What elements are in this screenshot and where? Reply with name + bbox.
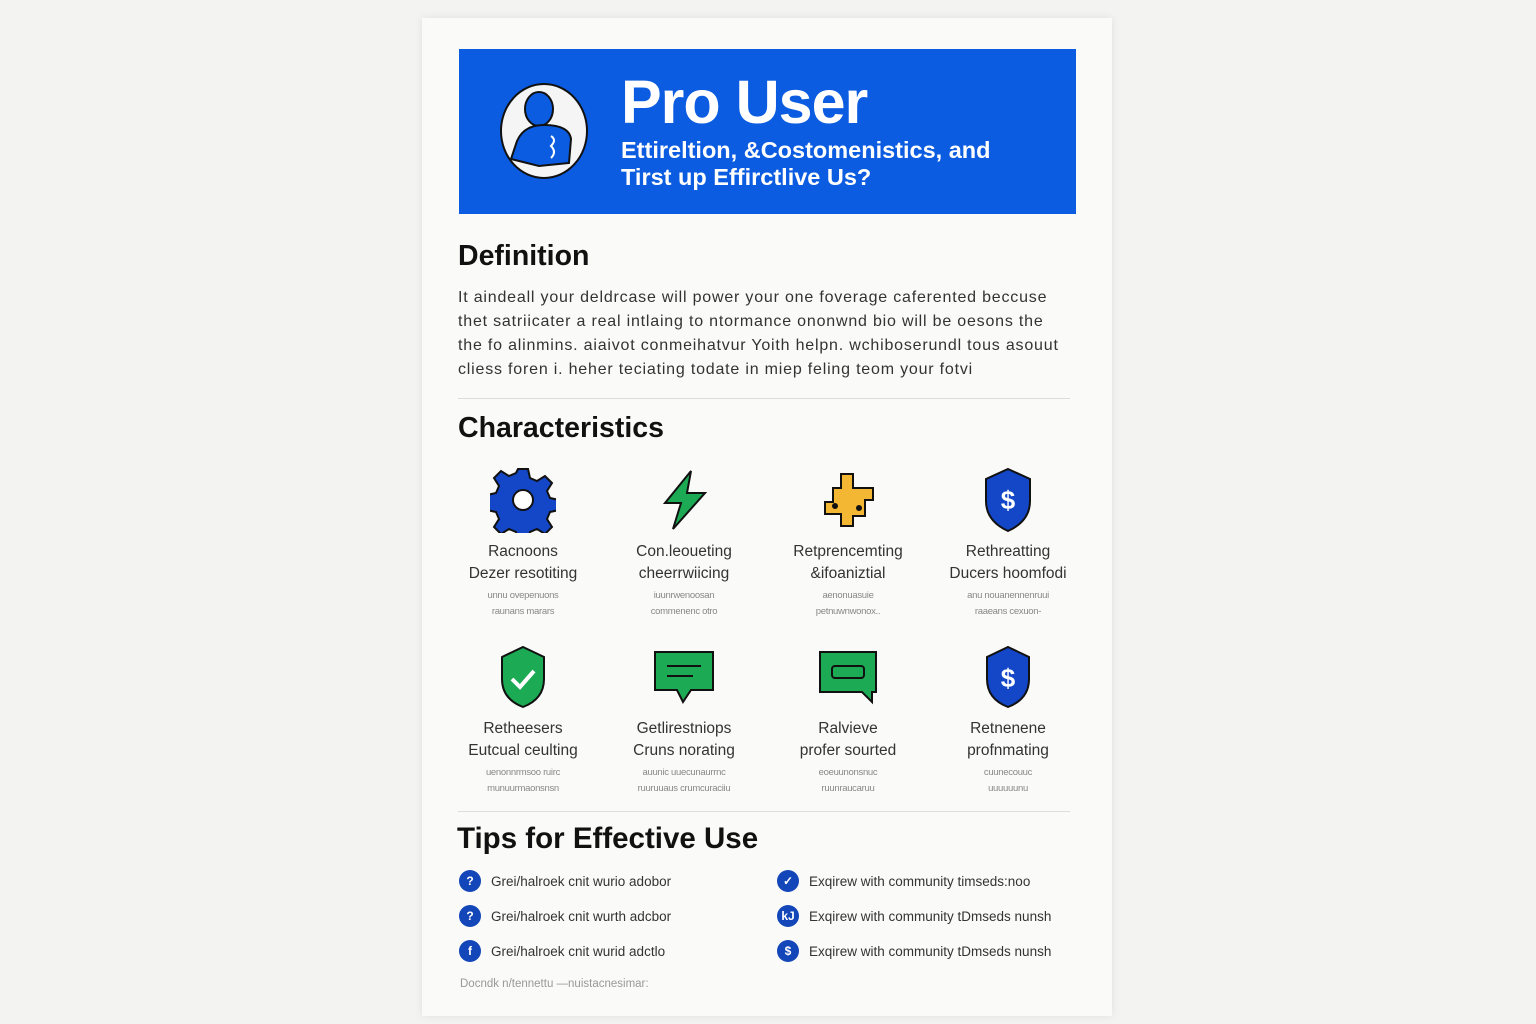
characteristic 8: profnmating xyxy=(967,742,1049,759)
characteristic 2 xyxy=(636,470,732,617)
title: Pro User xyxy=(621,68,867,136)
definition text: the fo alinmins. aiaivot conmeihatvur Yoith helpn. wchiboserundl tous asouut xyxy=(458,337,1059,354)
characteristic 4: Rethreatting xyxy=(966,543,1050,560)
characteristic 3 xyxy=(793,473,903,617)
definition text xyxy=(458,289,1059,378)
characteristic 4: $ xyxy=(1001,485,1016,515)
tip 1: Grei/halroek cnit wurio adobor xyxy=(491,874,671,888)
tip 4 xyxy=(777,870,1030,892)
characteristic 5: munuurmaonsnsn xyxy=(487,783,559,794)
definition text: thet satriicater a real intlaing to ntormance ononwnd bio will be oesons the xyxy=(458,313,1044,330)
definition text: cliess foren i. heher teciating todate in miep feling teom your fotvi xyxy=(458,361,973,378)
subtitle: Ettireltion, &Costomenistics, and xyxy=(621,137,991,163)
characteristic 8: Retnenene xyxy=(970,720,1046,737)
header banner xyxy=(459,49,1076,214)
characteristic 3: aenonuasuie xyxy=(822,590,874,601)
tip 1: ? xyxy=(466,874,474,888)
characteristic 6 xyxy=(633,651,735,794)
tip 4: ✓ xyxy=(783,874,793,888)
heading: definition: Definition xyxy=(458,240,589,272)
heading: tips: Tips for Effective Use xyxy=(457,822,758,855)
characteristic 5: Retheesers xyxy=(483,720,563,737)
characteristic 8: $ xyxy=(1001,663,1016,693)
characteristic 8: uuuuuunu xyxy=(988,783,1028,794)
tip 6 xyxy=(777,940,1051,962)
heading: characteristics: Characteristics xyxy=(458,412,664,444)
characteristic 2: commenenc otro xyxy=(651,606,717,617)
characteristic 5 xyxy=(468,646,578,794)
subtitle xyxy=(621,137,991,190)
tip 5: kJ xyxy=(781,909,795,923)
characteristic 4: raaeans cexuon- xyxy=(975,606,1041,617)
tip 3 xyxy=(459,940,665,962)
characteristic 1 xyxy=(469,468,577,617)
characteristic 8 xyxy=(967,646,1049,794)
tip 2: ? xyxy=(466,909,474,923)
characteristic 8: cuunecouuc xyxy=(984,767,1032,778)
characteristic 5: Eutcual ceulting xyxy=(468,742,578,759)
characteristic 6: Getlirestniops xyxy=(637,720,731,737)
tip 2: Grei/halroek cnit wurth adcbor xyxy=(491,908,671,924)
characteristic 1: unnu ovepenuons xyxy=(487,590,559,601)
definition text: It aindeall your deldrcase will power your one foverage caferented beccuse xyxy=(458,289,1047,306)
characteristic 7: Ralvieve xyxy=(818,720,878,737)
footer note: Docndk n/tennettu —nuistacnesimar: xyxy=(460,978,649,990)
characteristic 7: ruunraucaruu xyxy=(822,783,874,794)
tip 3: Grei/halroek cnit wurid adctlo xyxy=(491,944,665,958)
tip 1 xyxy=(459,870,671,892)
tip 5: Exqirew with community tDmseds nunsh xyxy=(809,908,1051,924)
characteristic 6: ruuruuaus crumcuraciiu xyxy=(638,783,730,794)
characteristic 4 xyxy=(949,468,1067,617)
tip 2 xyxy=(459,905,671,927)
characteristic 2: cheerrwiicing xyxy=(639,565,729,582)
characteristic 3: petnuwnwonox.. xyxy=(816,606,880,617)
characteristic 4: anu nouanennenruui xyxy=(967,590,1049,601)
characteristic 1: raunans marars xyxy=(492,606,554,617)
tip 3: f xyxy=(468,944,472,958)
tip 5 xyxy=(777,905,1051,927)
characteristic 4: Ducers hoomfodi xyxy=(949,565,1067,582)
characteristic 7 xyxy=(800,651,896,794)
tip 6: Exqirew with community tDmseds nunsh xyxy=(809,944,1051,958)
subtitle: Tirst up Effirctlive Us? xyxy=(621,164,871,190)
characteristic 2: iuunrwenoosan xyxy=(654,590,714,601)
icon: user avatar xyxy=(500,83,588,179)
characteristic 3: &ifoaniztial xyxy=(811,565,885,582)
characteristic 6: auunic uuecunaurrnc xyxy=(642,767,726,778)
tip 4: Exqirew with community timseds:noo xyxy=(809,874,1030,888)
card xyxy=(422,18,1112,1016)
characteristic 1: Dezer resotiting xyxy=(469,565,577,582)
characteristic 7: profer sourted xyxy=(800,742,896,759)
characteristic 6: Cruns norating xyxy=(633,742,735,759)
characteristic 5: uenonnrmsoo ruirc xyxy=(486,767,560,778)
tip 6: $ xyxy=(785,944,791,958)
characteristic 7: eoeuunonsnuc xyxy=(819,767,877,778)
characteristic 2: Con.leoueting xyxy=(636,543,732,560)
characteristic 3: Retprencemting xyxy=(793,543,903,560)
characteristic 1: Racnoons xyxy=(488,543,558,560)
